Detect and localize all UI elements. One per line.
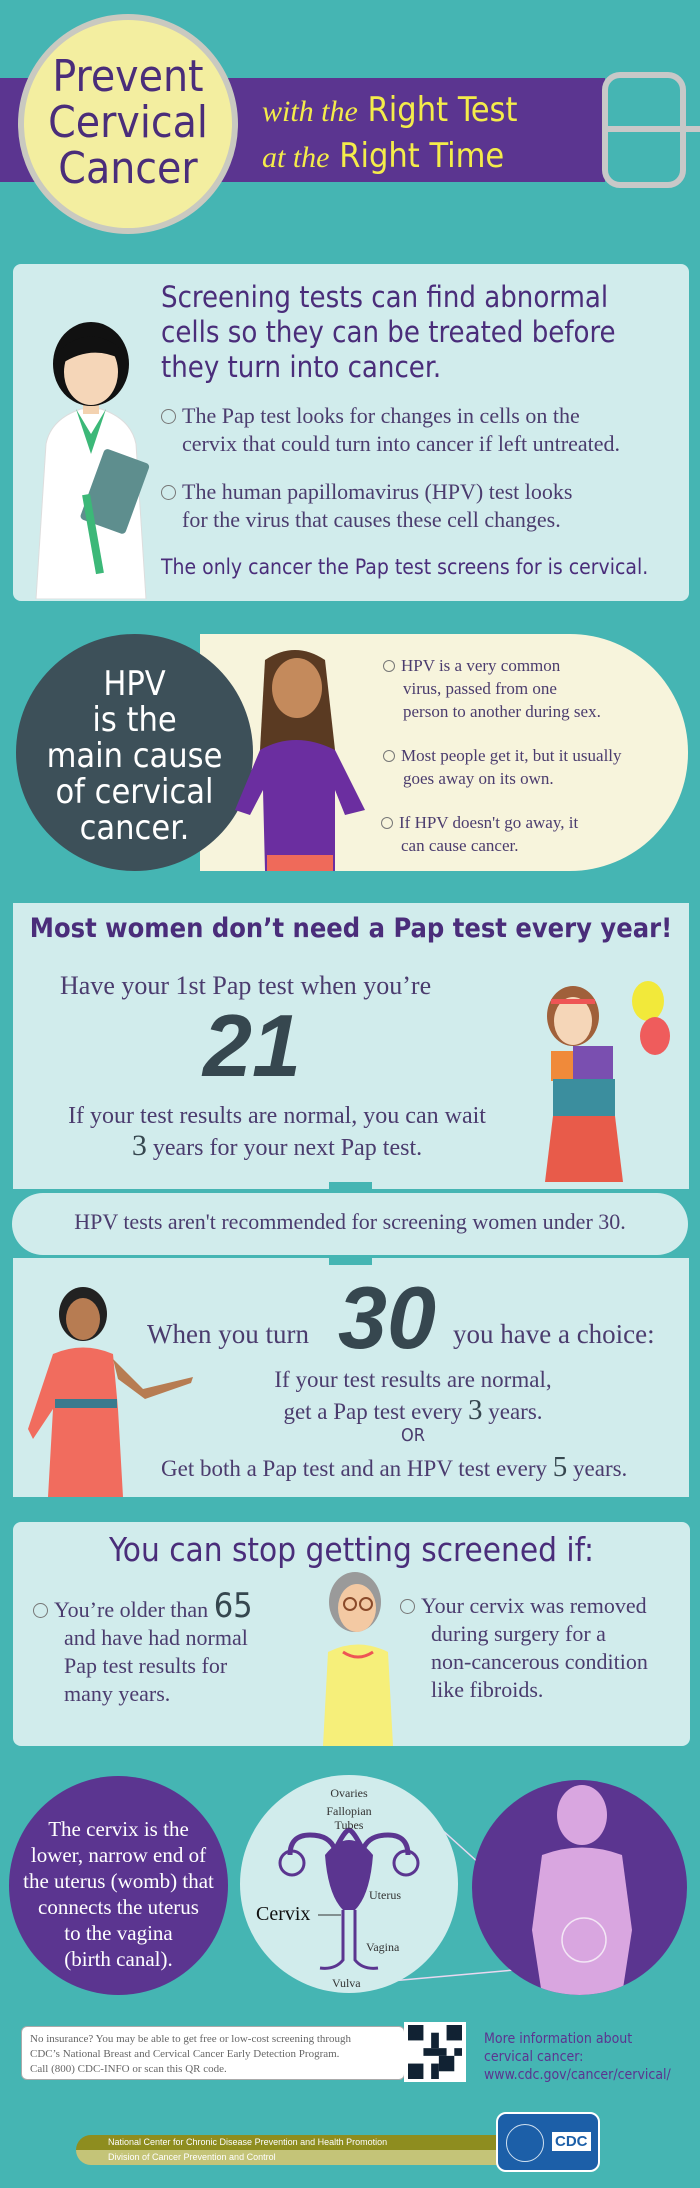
panel: HPV main cause: can cause cancer. [401, 836, 518, 855]
panel: stop screening [13, 1522, 690, 1746]
text: when you turn 30: When you turn [147, 1319, 309, 1349]
bullet: older than 65: You’re older than 65 [54, 1586, 253, 1626]
bullets: virus, passed from one [403, 679, 557, 698]
clock circle title [18, 14, 238, 234]
panel: screening tests [13, 264, 689, 601]
purple band [0, 78, 605, 182]
subtitle: with the Right Test [262, 90, 517, 130]
circle: anatomy diagram: Vagina [366, 1940, 400, 1954]
text: choices: If your test results are normal, [274, 1367, 552, 1392]
circle: anatomy diagram: Fallopian [326, 1804, 372, 1818]
text: wait 3 years: If your test results are normal, you can wait [68, 1103, 486, 1129]
circle: cervix definition: lower, narrow end of [31, 1843, 206, 1867]
circle: cervix definition: the uterus (womb) that [23, 1869, 214, 1893]
footer bar: Division of Cancer Prevention and Control [108, 2152, 276, 2162]
bullet: pap test [161, 403, 620, 456]
panel: age 30: you have a choice: [453, 1319, 655, 1349]
heading: Most women don’t need a Pap test every year! [30, 913, 672, 944]
circle: cervix definition [9, 1776, 228, 1995]
panel: HPV main cause: If HPV doesn't go away, it [399, 813, 578, 832]
callout: no insurance: No insurance? You may be able to get free or low-cost screening through [30, 2033, 351, 2045]
text: choices [274, 1367, 552, 1426]
text: wait 3 years [68, 1103, 486, 1162]
callout: HPV under 30 [12, 1193, 688, 1255]
text: first pap: Have your 1st Pap test when you’re [60, 971, 431, 1000]
circle: anatomy diagram: Cervix [256, 1903, 310, 1925]
dark circle heading: is the [92, 700, 177, 740]
icon: doctor [36, 322, 150, 599]
title: Cervical [48, 97, 208, 148]
callout: no insurance [21, 2026, 405, 2080]
panel: HPV main cause [16, 634, 688, 871]
icon: QR code [404, 2022, 466, 2082]
cream pill [200, 634, 688, 871]
number 21: 21 [203, 996, 301, 1095]
panel: HPV main cause: Most people get it, but it usually [401, 746, 622, 765]
icon: CDC logo [496, 2112, 600, 2172]
dark circle heading: of cervical [55, 772, 214, 812]
circle: anatomy diagram: Ovaries [330, 1786, 368, 1800]
heading text [161, 280, 616, 384]
callout: no insurance: Call (800) CDC-INFO or scan this QR code. [30, 2063, 227, 2075]
bullet: cervix removed: non-cancerous condition [431, 1649, 648, 1674]
footer bar [76, 2135, 496, 2165]
bullet: cervix removed: Your cervix was removed [421, 1593, 647, 1618]
circle: anatomy diagram: Vulva [332, 1976, 361, 1990]
bullet: older than 65 [33, 1586, 253, 1706]
text: more info: www.cdc.gov/cancer/cervical/ [484, 2067, 671, 2083]
panel: age 30: OR [401, 1425, 425, 1446]
dark circle heading: main cause [47, 736, 222, 776]
title: Cancer [58, 143, 198, 194]
banner [0, 14, 700, 234]
circle: cervix definition: connects the uterus [38, 1895, 199, 1919]
footer bar: National Center for Chronic Disease Prevention and Health Promotion [108, 2137, 387, 2147]
callout: no insurance: CDC’s National Breast and Cervical Cancer Early Detection Program. [30, 2048, 339, 2060]
heading text: Screening tests can find abnormal [161, 280, 608, 314]
icon: woman red dress [28, 1287, 193, 1497]
bullets: person to another during sex. [403, 702, 601, 721]
callout: HPV under 30: HPV tests aren't recommended for screening women under 30. [74, 1209, 626, 1234]
number 30: 30 [338, 1268, 436, 1367]
bullet: older than 65: Pap test results for [64, 1653, 227, 1678]
circle: cervix definition: The cervix is the [48, 1817, 189, 1841]
zoom lines [398, 1830, 512, 1982]
icon: woman purple top [235, 650, 365, 871]
bullet: pap test: The Pap test looks for changes in cells on the [182, 403, 580, 428]
heading text: cells so they can be treated before [161, 315, 616, 349]
bullet: cervix removed [400, 1593, 648, 1702]
text: more info: More information about [484, 2031, 632, 2047]
icon: clock tab right [602, 72, 686, 188]
bullet: older than 65: and have had normal [64, 1625, 248, 1650]
dark circle heading: cancer. [80, 808, 189, 848]
bullet: older than 65: many years. [64, 1681, 170, 1706]
text: more info: cervical cancer: [484, 2049, 583, 2065]
title [48, 51, 208, 194]
panel: most women [13, 903, 689, 1182]
panel: age 30: Get both a Pap test and an HPV test every 5 years. [161, 1451, 627, 1483]
bullet: hpv test: for the virus that causes these cell changes. [182, 507, 561, 532]
text: choices: get a Pap test every 3 years. [283, 1394, 543, 1426]
subtitle: at the Right Time [262, 136, 504, 176]
bullets: HPV is a very common [401, 656, 560, 675]
circle: body silhouette [472, 1780, 687, 1995]
bullet: cervix removed: like fibroids. [431, 1677, 543, 1702]
icon: older woman [323, 1572, 393, 1746]
bullet: hpv test: The human papillomavirus (HPV) test looks [182, 479, 572, 504]
circle: anatomy diagram [240, 1775, 458, 1993]
bullets [383, 656, 601, 721]
bullet: hpv test [161, 479, 572, 532]
circle: anatomy diagram: Uterus [369, 1888, 401, 1902]
dark circle heading: HPV [103, 664, 166, 704]
bullet: cervix removed: during surgery for a [431, 1621, 606, 1646]
icon: girl with gifts [545, 981, 670, 1182]
anatomy section [9, 1775, 687, 1995]
footer statement: The only cancer the Pap test screens for is cervical. [161, 555, 648, 579]
heading: You can stop getting screened if: [109, 1530, 594, 1569]
connector strips [13, 1182, 329, 1189]
circle: cervix definition: (birth canal). [64, 1947, 173, 1971]
circle: cervix definition: to the vagina [64, 1921, 173, 1945]
heading text: they turn into cancer. [161, 350, 441, 384]
subtitle [262, 90, 517, 176]
dark circle heading [16, 634, 253, 871]
title: Prevent [52, 51, 204, 102]
bullet: pap test: cervix that could turn into cancer if left untreated. [182, 431, 620, 456]
text: wait 3 years: 3 years for your next Pap test. [132, 1129, 422, 1162]
icon: CDC logo: CDC [555, 2133, 588, 2150]
text: more info [484, 2031, 671, 2083]
panel: age 30 [13, 1265, 689, 1497]
circle: anatomy diagram: Tubes [335, 1818, 364, 1832]
panel: HPV main cause: goes away on its own. [403, 769, 554, 788]
